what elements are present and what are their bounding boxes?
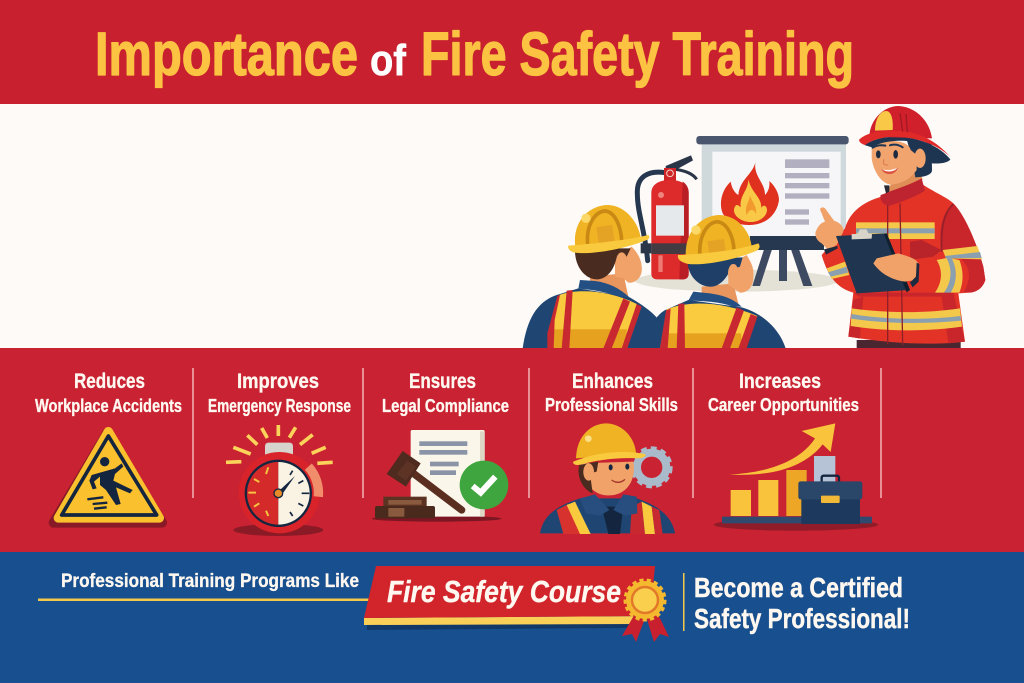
clipboard	[836, 233, 910, 293]
title: Fire Safety Training	[421, 20, 854, 88]
presentation board	[696, 136, 849, 286]
chest reflective stripe	[856, 222, 935, 239]
floor shadow	[635, 270, 838, 292]
hair and face	[907, 139, 932, 177]
icon: award rosette	[622, 581, 669, 642]
helmet	[864, 137, 950, 163]
worker two from behind	[644, 215, 786, 348]
benefit: enhances professional skills	[545, 370, 678, 415]
panel: training illustration	[0, 104, 1024, 348]
benefit: reduces workplace accidents: Workplace Accidents	[35, 395, 182, 416]
intro line: Professional Training Programs Like	[61, 571, 359, 592]
panel: title band	[0, 0, 1024, 104]
sleeve	[920, 257, 969, 293]
banner: fire safety course: Fire Safety Course	[387, 574, 621, 609]
call to action text: Become a Certified	[694, 572, 903, 603]
panel: call to action band	[0, 550, 1024, 683]
title	[95, 20, 854, 88]
benefit: ensures legal compliance	[382, 370, 509, 416]
benefit: improves emergency response	[208, 370, 351, 416]
divider	[683, 573, 684, 631]
neck and collar	[885, 168, 923, 195]
worker one from behind	[523, 205, 657, 348]
banner: fire safety course	[364, 566, 669, 642]
benefit: reduces workplace accidents: Reduces	[74, 370, 145, 393]
benefit: increases career opportunities: Increases	[739, 370, 821, 393]
jacket	[822, 185, 985, 344]
benefit: enhances professional skills: Professional Skills	[545, 394, 678, 415]
hem reflective stripes	[851, 308, 962, 330]
benefit: improves emergency response: Emergency Response	[208, 395, 351, 416]
benefit: increases career opportunities: Career Opportunities	[708, 394, 859, 415]
icon: growth chart and briefcase	[714, 423, 878, 531]
benefit: increases career opportunities	[708, 370, 859, 415]
call to action text: Safety Professional!	[694, 603, 910, 634]
title: Importance	[95, 20, 358, 88]
pointing hand	[815, 207, 843, 250]
icon: slippery floor warning sign	[54, 432, 162, 523]
benefit: improves emergency response: Improves	[237, 370, 319, 393]
benefit: reduces workplace accidents	[35, 370, 182, 416]
icon: stopwatch	[226, 425, 333, 536]
title: of	[370, 36, 406, 85]
panel: five benefits band	[0, 348, 1024, 552]
benefit: ensures legal compliance: Ensures	[409, 370, 476, 393]
benefit: ensures legal compliance: Legal Compliance	[382, 395, 509, 416]
icon: skilled worker with gear	[540, 423, 675, 534]
icon: gavel and approved document	[372, 430, 508, 522]
firefighter instructor	[815, 106, 985, 348]
call to action text	[694, 572, 910, 634]
fire extinguisher	[637, 155, 697, 279]
benefit: enhances professional skills: Enhances	[572, 370, 653, 393]
